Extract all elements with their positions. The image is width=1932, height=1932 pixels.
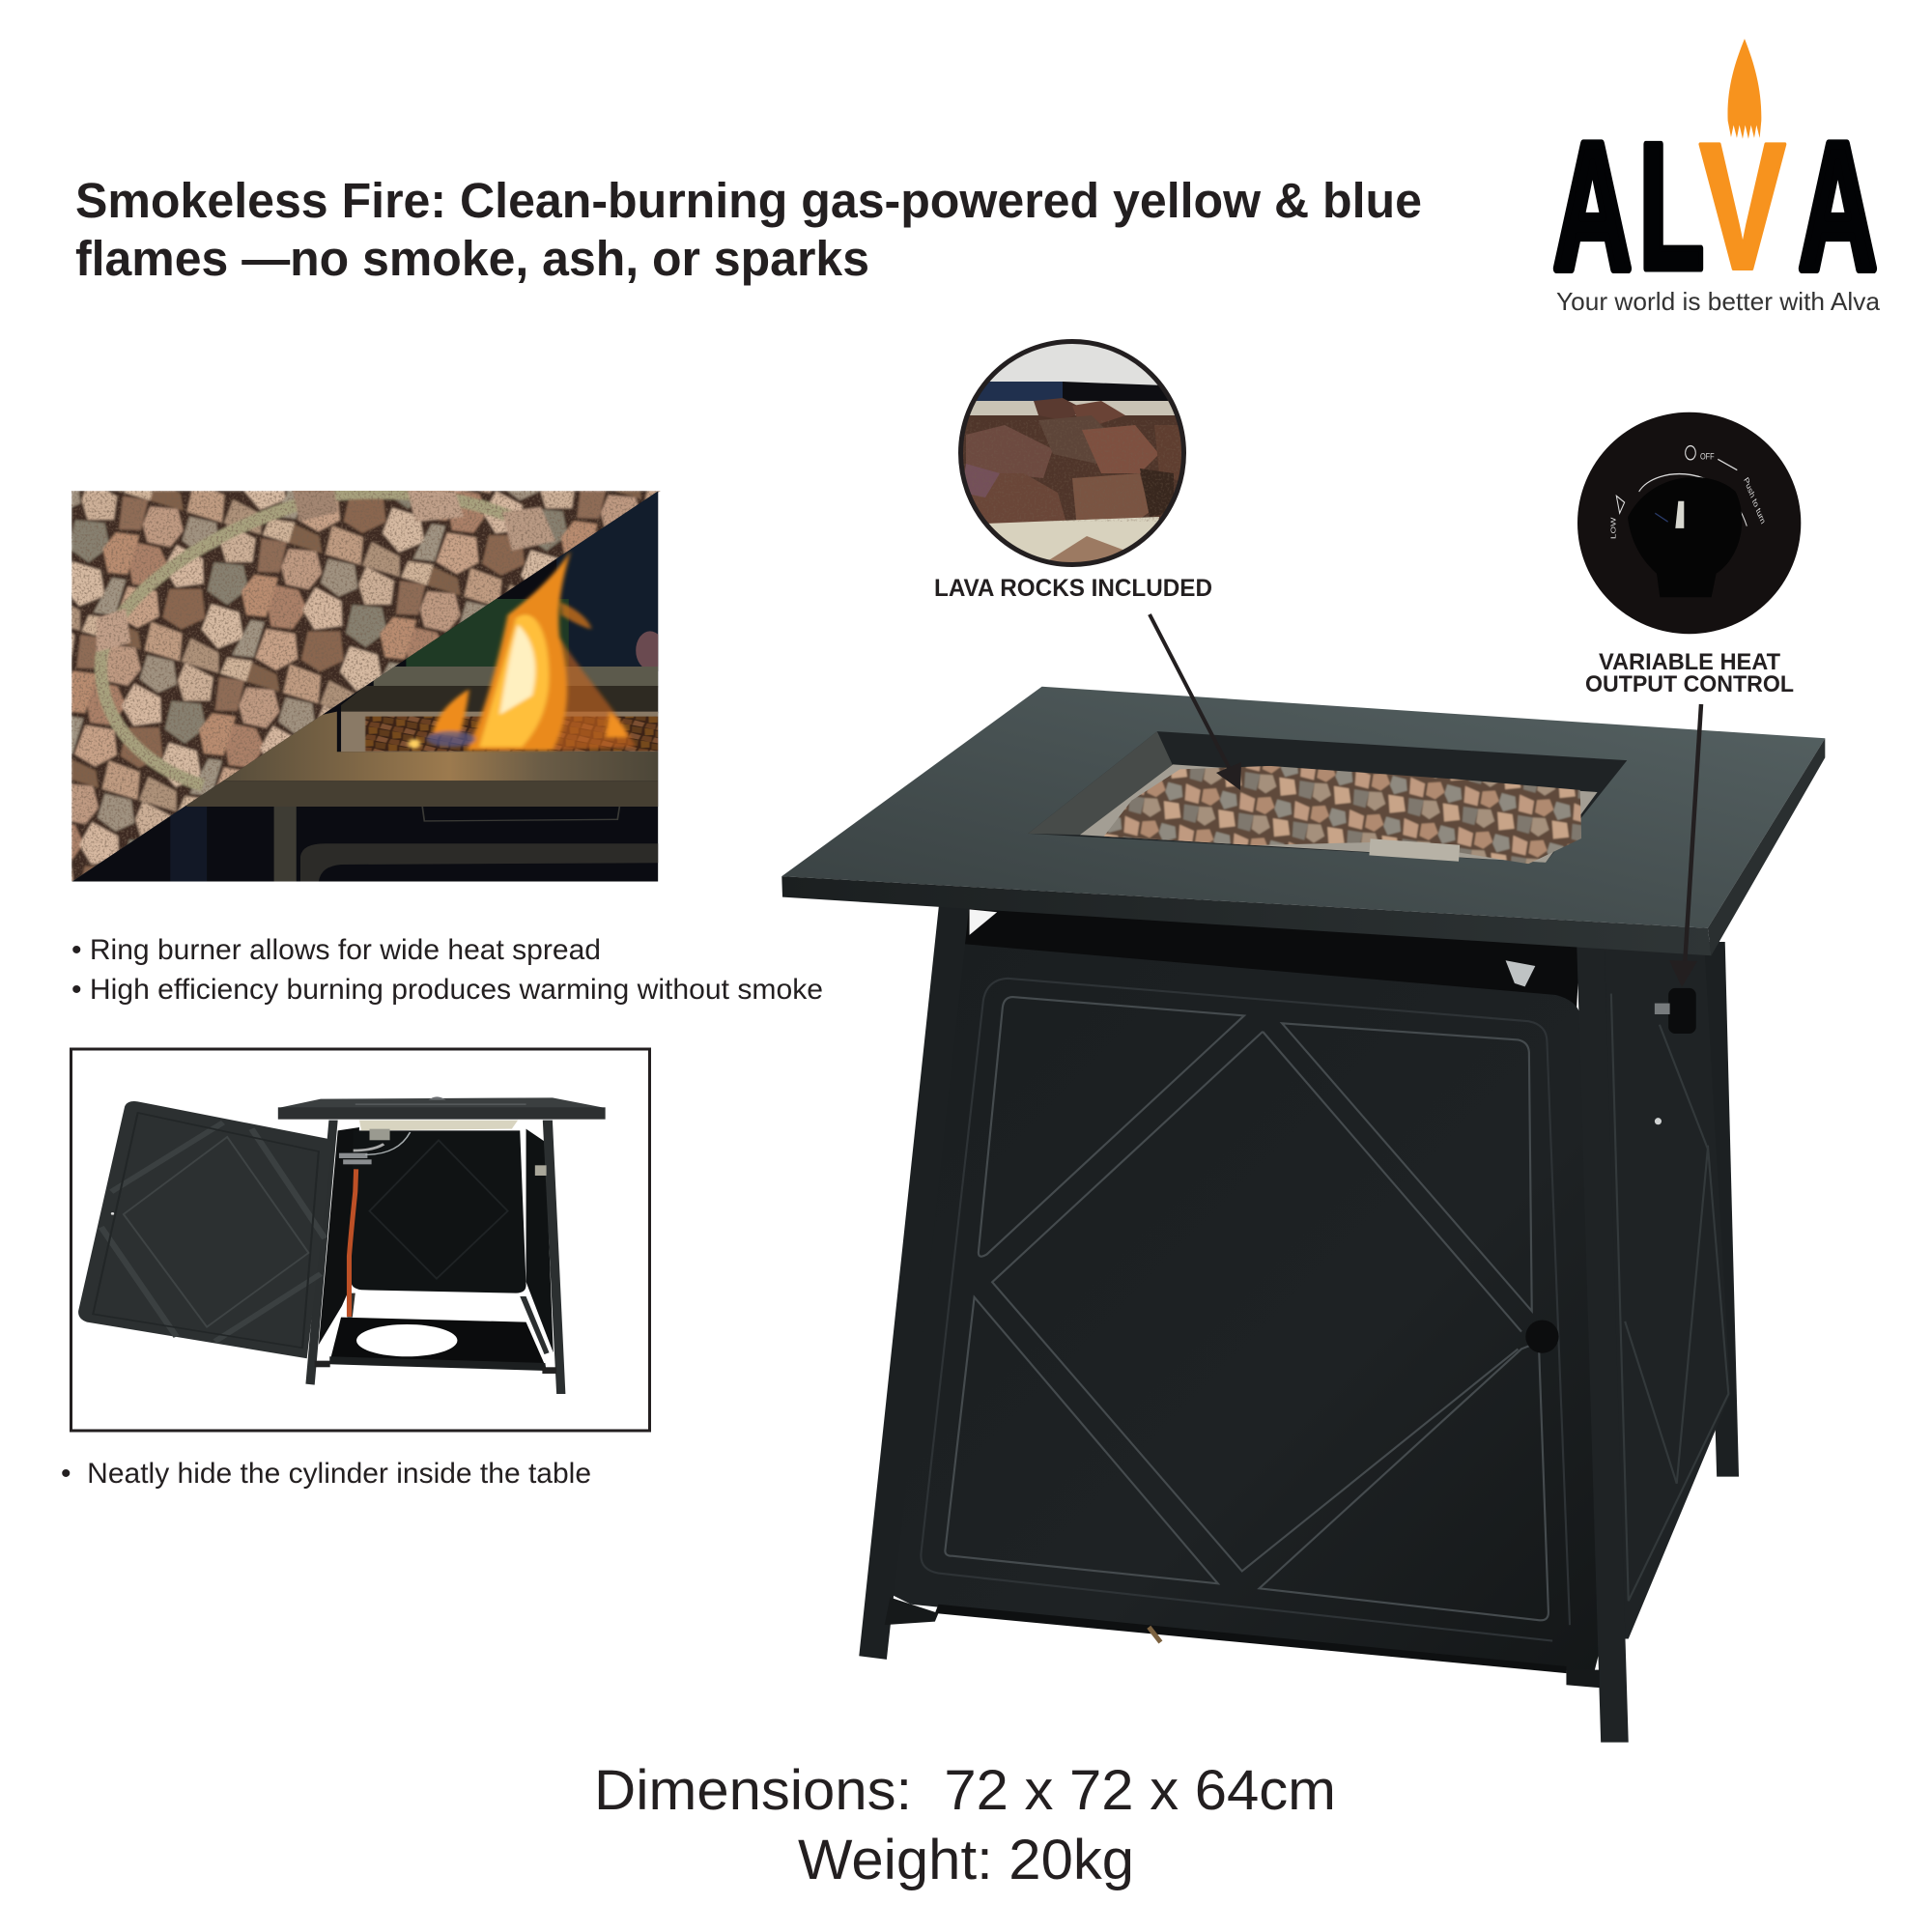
arrow: heat control <box>1669 704 1701 987</box>
title: Smokeless Fire: Clean-burning gas-powered yellow & blue <box>75 173 1422 228</box>
panel frame <box>71 1049 649 1431</box>
callout image: control knob <box>1577 412 1801 634</box>
arrow: lava rocks <box>1150 614 1241 790</box>
lava rocks half <box>71 478 661 882</box>
title: flames —no smoke, ash, or sparks <box>75 231 869 286</box>
burner well <box>1028 731 1627 863</box>
label: lava rocks included: LAVA ROCKS INCLUDED <box>934 575 1212 602</box>
lower frame bar and feet <box>935 1605 1566 1673</box>
pit lava rocks <box>1097 762 1587 866</box>
flame scene half <box>71 491 665 882</box>
callout image: lava rocks <box>956 338 1188 570</box>
product: fire pit table <box>781 687 1825 1743</box>
bullet text: cylinder storage: • Neatly hide the cylinder inside the table <box>61 1458 591 1490</box>
door handle <box>1525 1320 1559 1353</box>
logo wordmark: A <box>1553 104 1632 307</box>
photo: lava rocks and flame composite <box>71 478 665 882</box>
panel: open door view <box>71 1049 649 1431</box>
illustration: fire pit with open door <box>78 1096 606 1394</box>
logo tagline: Your world is better with Alva <box>1556 287 1881 316</box>
callout image: control knob: OFF <box>1700 452 1715 461</box>
bullet text: burner benefits: • High efficiency burning produces warming without smoke <box>71 974 823 1006</box>
logo wordmark: L <box>1638 104 1705 307</box>
label: variable heat output control <box>1585 649 1794 697</box>
bullet text: burner benefits: • Ring burner allows for wide heat spread <box>71 934 601 966</box>
front left leg <box>859 897 970 1660</box>
gap under tabletop <box>959 900 1580 1008</box>
side control knob <box>1668 988 1696 1034</box>
dimensions text: Weight: 20kg <box>798 1829 1134 1891</box>
logo flame icon <box>1727 39 1761 139</box>
callout image: control knob: LOW <box>1609 517 1617 539</box>
logo: Alva <box>1553 39 1881 316</box>
callout image: control knob: Push to turn <box>1742 475 1768 526</box>
title <box>75 173 1422 286</box>
tabletop <box>278 1097 606 1108</box>
back right leg <box>1701 942 1739 1477</box>
logo wordmark <box>1553 104 1877 307</box>
logo wordmark: V <box>1699 105 1786 307</box>
bullet text: burner benefits <box>71 934 823 1006</box>
label: variable heat output control: OUTPUT CONTROL <box>1585 671 1794 697</box>
door <box>890 944 1605 1673</box>
logo wordmark: A <box>1799 104 1877 307</box>
tabletop surface <box>781 687 1825 928</box>
front right leg <box>1577 942 1629 1743</box>
tabletop front edge <box>781 876 1711 955</box>
gas hose <box>349 1169 356 1317</box>
dimensions text: Dimensions: 72 x 72 x 64cm <box>594 1759 1336 1822</box>
open door leaf <box>78 1101 332 1358</box>
label: variable heat output control: VARIABLE HEAT <box>1599 649 1780 675</box>
dimensions text <box>594 1759 1336 1891</box>
side panel <box>1594 942 1730 1638</box>
